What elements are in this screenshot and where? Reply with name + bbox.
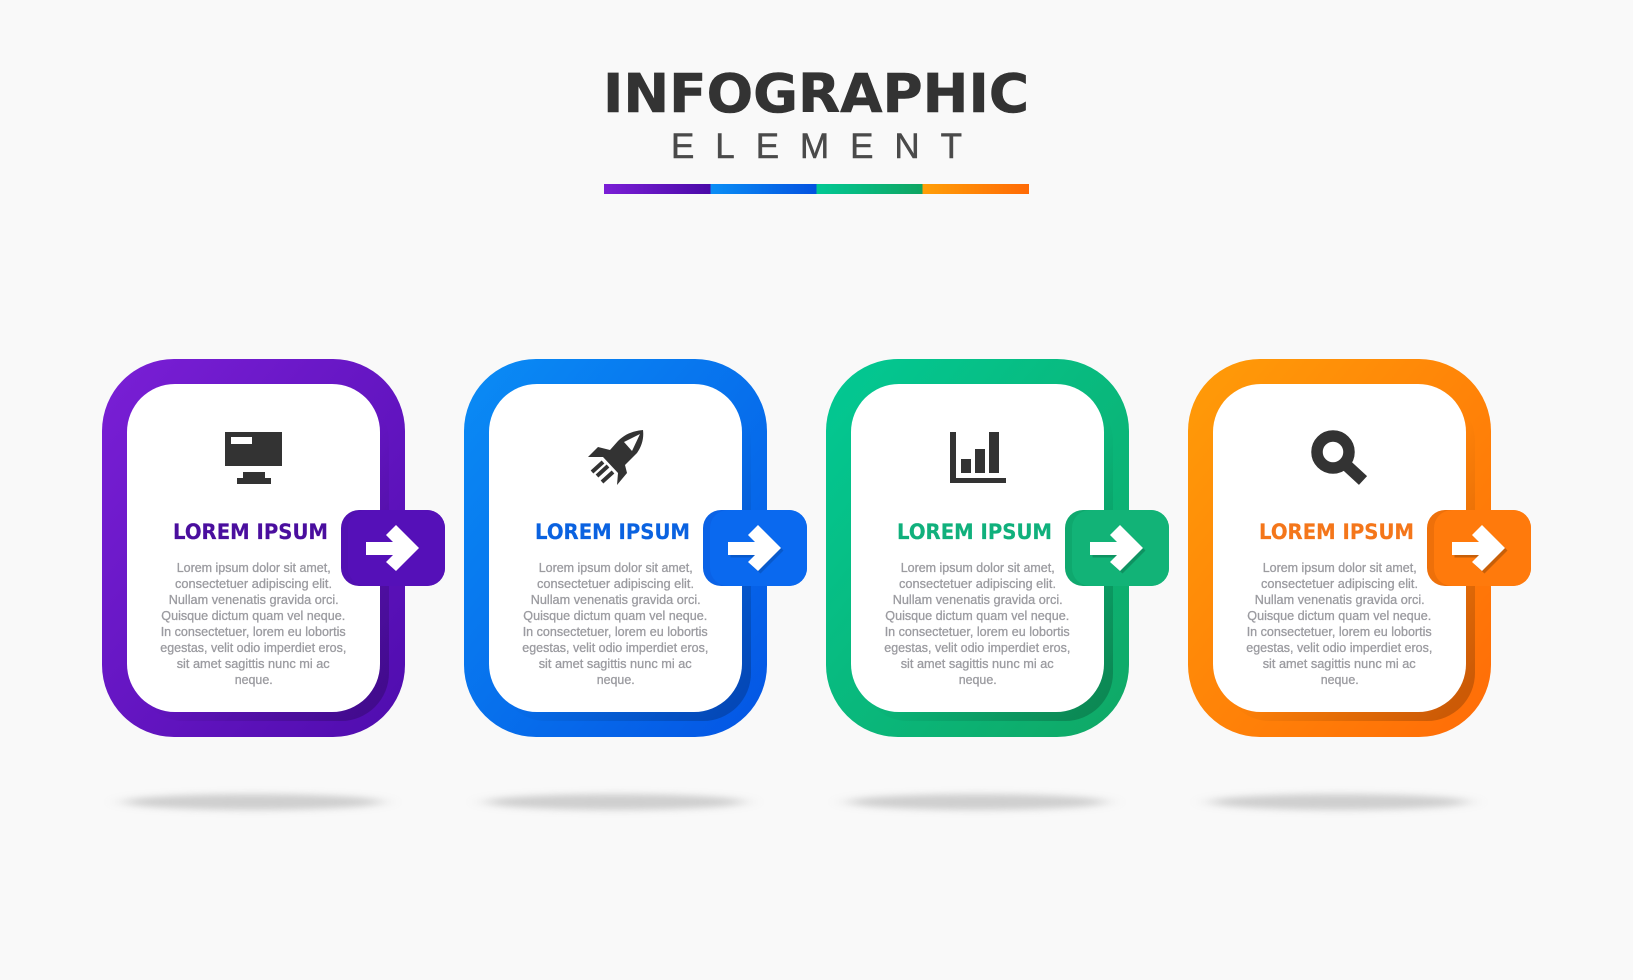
body text: egestas, velit odio imperdiet eros, — [1246, 640, 1432, 655]
heading: LOREM IPSUM — [535, 520, 690, 544]
icon: magnifier — [1317, 436, 1363, 480]
body text: Quisque dictum quam vel neque. — [885, 608, 1069, 623]
body text: Lorem ipsum dolor sit amet, — [1263, 560, 1417, 575]
body text: Lorem ipsum dolor sit amet, — [177, 560, 331, 575]
frame — [102, 359, 405, 737]
icon: arrow — [1090, 525, 1143, 571]
icon: rocket — [588, 430, 643, 485]
body text: Nullam venenatis gravida orci. — [531, 592, 701, 607]
body text: Quisque dictum quam vel neque. — [1247, 608, 1431, 623]
body text: sit amet sagittis nunc mi ac — [901, 656, 1054, 671]
body text — [1246, 560, 1432, 687]
icon: bar chart — [950, 432, 1006, 483]
arrow button — [1065, 510, 1169, 586]
floor shadow — [123, 794, 383, 810]
body text: Quisque dictum quam vel neque. — [523, 608, 707, 623]
floor shadow — [1209, 794, 1469, 810]
body text: egestas, velit odio imperdiet eros, — [522, 640, 708, 655]
panel: step 4 orange — [1188, 359, 1531, 810]
body text: neque. — [235, 672, 273, 687]
icon: arrow — [728, 525, 781, 571]
body text: sit amet sagittis nunc mi ac — [539, 656, 692, 671]
arrow button — [703, 510, 807, 586]
frame — [826, 359, 1129, 737]
arrow button — [1427, 510, 1531, 586]
heading: LOREM IPSUM — [173, 520, 328, 544]
icon: arrow — [1452, 525, 1505, 571]
arrow button — [341, 510, 445, 586]
body text: Nullam venenatis gravida orci. — [169, 592, 339, 607]
body text — [884, 560, 1070, 687]
floor shadow — [847, 794, 1107, 810]
body text: egestas, velit odio imperdiet eros, — [160, 640, 346, 655]
body text: consectetuer adipiscing elit. — [537, 576, 694, 591]
heading: LOREM IPSUM — [897, 520, 1052, 544]
panel: step 2 blue — [464, 359, 807, 810]
floor shadow — [485, 794, 745, 810]
body text: In consectetuer, lorem eu lobortis — [885, 624, 1070, 639]
body text: In consectetuer, lorem eu lobortis — [161, 624, 346, 639]
frame — [1188, 359, 1491, 737]
body text: sit amet sagittis nunc mi ac — [177, 656, 330, 671]
body text: egestas, velit odio imperdiet eros, — [884, 640, 1070, 655]
body text: Quisque dictum quam vel neque. — [161, 608, 345, 623]
body text: sit amet sagittis nunc mi ac — [1263, 656, 1416, 671]
panel: step 1 purple — [102, 359, 445, 810]
body text — [160, 560, 346, 687]
body text: Nullam venenatis gravida orci. — [893, 592, 1063, 607]
subtitle: ELEMENT — [671, 127, 962, 166]
body text: consectetuer adipiscing elit. — [899, 576, 1056, 591]
icon: monitor — [225, 432, 282, 484]
body text: Lorem ipsum dolor sit amet, — [901, 560, 1055, 575]
colour bar — [604, 184, 1029, 194]
body text: In consectetuer, lorem eu lobortis — [1247, 624, 1432, 639]
body text — [522, 560, 708, 687]
heading: LOREM IPSUM — [1259, 520, 1414, 544]
body text: Lorem ipsum dolor sit amet, — [539, 560, 693, 575]
frame — [464, 359, 767, 737]
body text: neque. — [959, 672, 997, 687]
body text: neque. — [1321, 672, 1359, 687]
body text: In consectetuer, lorem eu lobortis — [523, 624, 708, 639]
title: INFOGRAPHIC — [603, 62, 1029, 125]
icon: arrow — [366, 525, 419, 571]
body text: neque. — [597, 672, 635, 687]
panel: step 3 green — [826, 359, 1169, 810]
body text: consectetuer adipiscing elit. — [175, 576, 332, 591]
body text: consectetuer adipiscing elit. — [1261, 576, 1418, 591]
body text: Nullam venenatis gravida orci. — [1255, 592, 1425, 607]
